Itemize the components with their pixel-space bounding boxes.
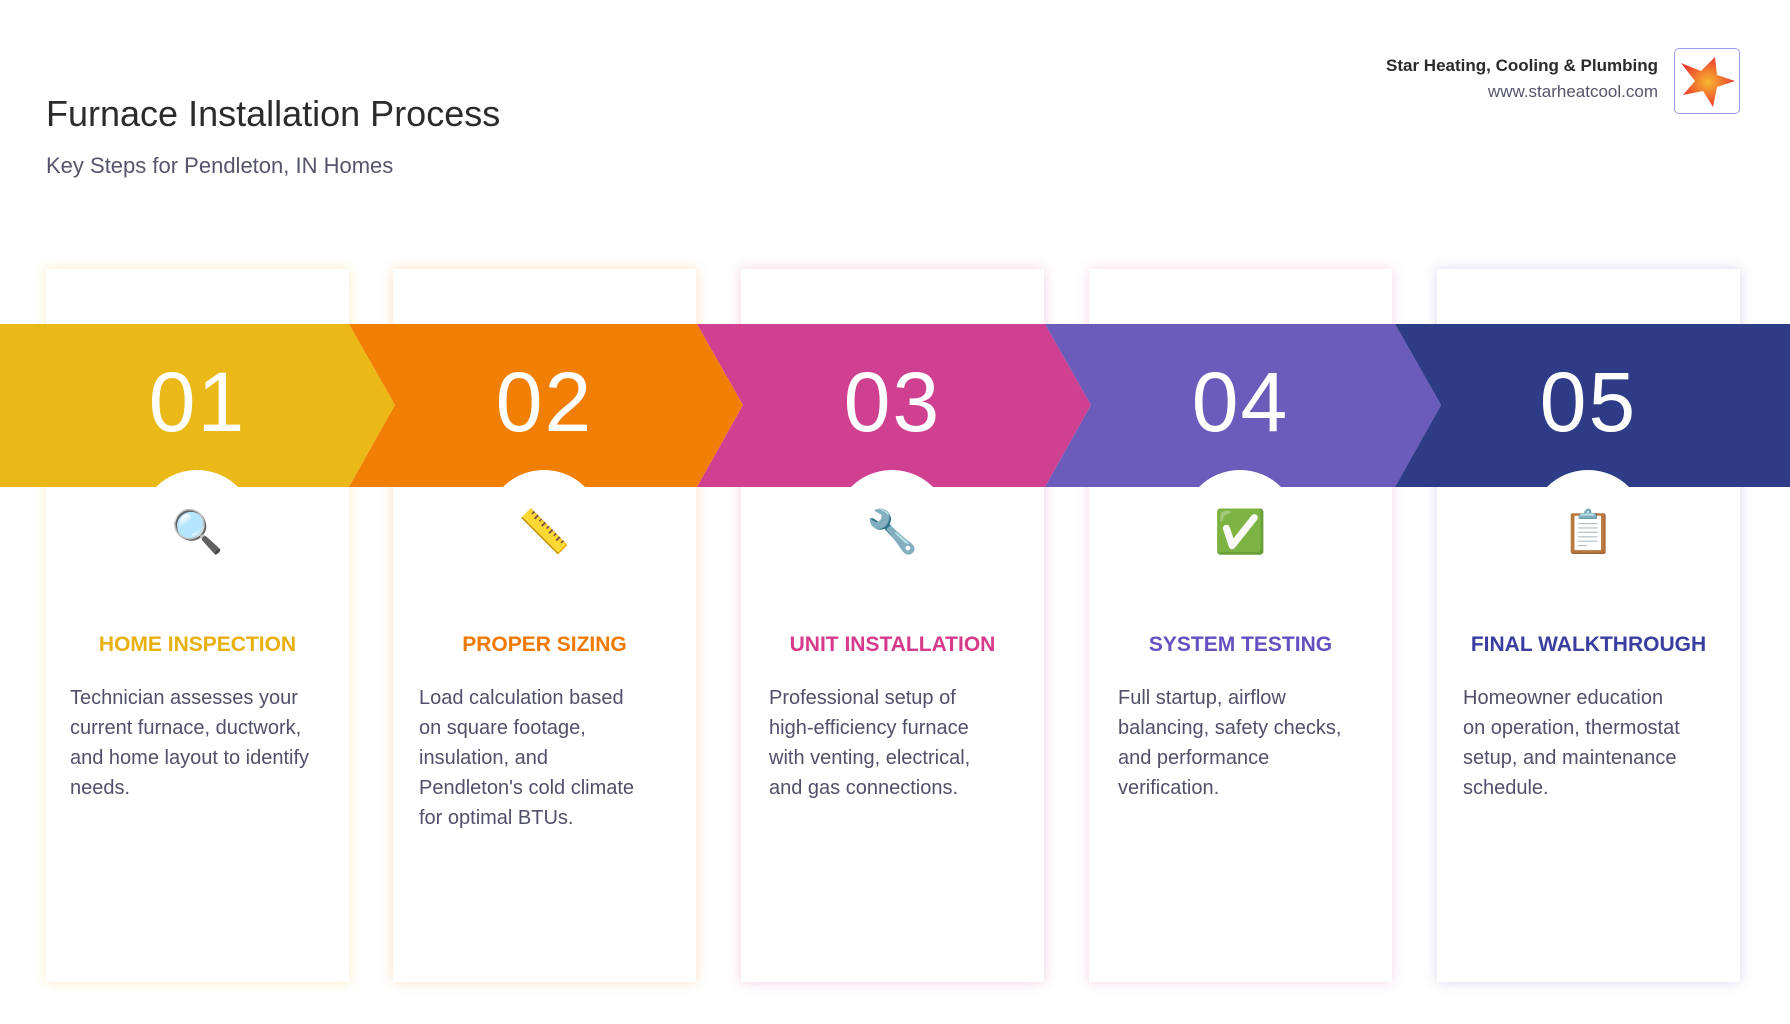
title: Furnace Installation Process bbox=[46, 93, 500, 134]
heading 2: PROPER SIZING bbox=[462, 633, 627, 656]
brand url: www.starheatcool.com bbox=[1488, 82, 1658, 101]
text 5: Homeowner education bbox=[1463, 687, 1663, 709]
text 4: and performance bbox=[1118, 747, 1269, 769]
heading 3: UNIT INSTALLATION bbox=[790, 633, 995, 656]
text 1: needs. bbox=[70, 777, 130, 799]
icon: clipboard: 📋 bbox=[1562, 508, 1615, 557]
text: 05 bbox=[1540, 355, 1637, 449]
text 2: insulation, and bbox=[419, 747, 548, 769]
step 2 bbox=[419, 355, 634, 829]
text 3: high-efficiency furnace bbox=[769, 717, 969, 739]
card 3 bbox=[741, 269, 1044, 982]
text 1: current furnace, ductwork, bbox=[70, 717, 301, 739]
text 3: with venting, electrical, bbox=[769, 747, 970, 769]
text 2 bbox=[419, 687, 634, 829]
icon: star logo bbox=[1674, 48, 1740, 114]
brand block bbox=[1386, 48, 1740, 114]
step 4 bbox=[1118, 355, 1341, 799]
text 2: for optimal BTUs. bbox=[419, 807, 573, 829]
text 5: schedule. bbox=[1463, 777, 1549, 799]
icon: check: ✅ bbox=[1214, 508, 1267, 557]
text: 02 bbox=[496, 355, 593, 449]
text: 01 bbox=[149, 355, 246, 449]
card 4 bbox=[1089, 269, 1392, 982]
text 1: and home layout to identify bbox=[70, 747, 309, 769]
heading 4: SYSTEM TESTING bbox=[1149, 633, 1332, 656]
heading 5: FINAL WALKTHROUGH bbox=[1471, 633, 1706, 656]
text: 04 bbox=[1192, 355, 1289, 449]
icon: ruler: 📏 bbox=[518, 508, 571, 557]
card 2 bbox=[393, 269, 696, 982]
text 4: verification. bbox=[1118, 777, 1219, 799]
text 2: on square footage, bbox=[419, 717, 586, 739]
step 3 bbox=[769, 355, 995, 799]
text: 03 bbox=[844, 355, 941, 449]
icon: magnifier: 🔍 bbox=[171, 508, 224, 557]
text 4: balancing, safety checks, bbox=[1118, 717, 1341, 739]
step 5 bbox=[1463, 355, 1706, 799]
text 5 bbox=[1463, 687, 1680, 799]
text 3 bbox=[769, 687, 970, 799]
text 4 bbox=[1118, 687, 1341, 799]
chevron band bbox=[0, 324, 1790, 487]
brand name: Star Heating, Cooling & Plumbing bbox=[1386, 56, 1658, 75]
text 3: and gas connections. bbox=[769, 777, 958, 799]
text 1: Technician assesses your bbox=[70, 687, 298, 709]
icon: wrench: 🔧 bbox=[866, 508, 919, 557]
text 4: Full startup, airflow bbox=[1118, 687, 1286, 709]
heading 1: HOME INSPECTION bbox=[99, 633, 296, 656]
card 5 bbox=[1437, 269, 1740, 982]
text 2: Pendleton's cold climate bbox=[419, 777, 634, 799]
text 5: setup, and maintenance bbox=[1463, 747, 1676, 769]
text 3: Professional setup of bbox=[769, 687, 956, 709]
text 1 bbox=[70, 687, 309, 799]
subtitle: Key Steps for Pendleton, IN Homes bbox=[46, 153, 393, 178]
card 1 bbox=[46, 269, 349, 982]
step 1 bbox=[70, 355, 309, 799]
text 2: Load calculation based bbox=[419, 687, 624, 709]
text 5: on operation, thermostat bbox=[1463, 717, 1680, 739]
